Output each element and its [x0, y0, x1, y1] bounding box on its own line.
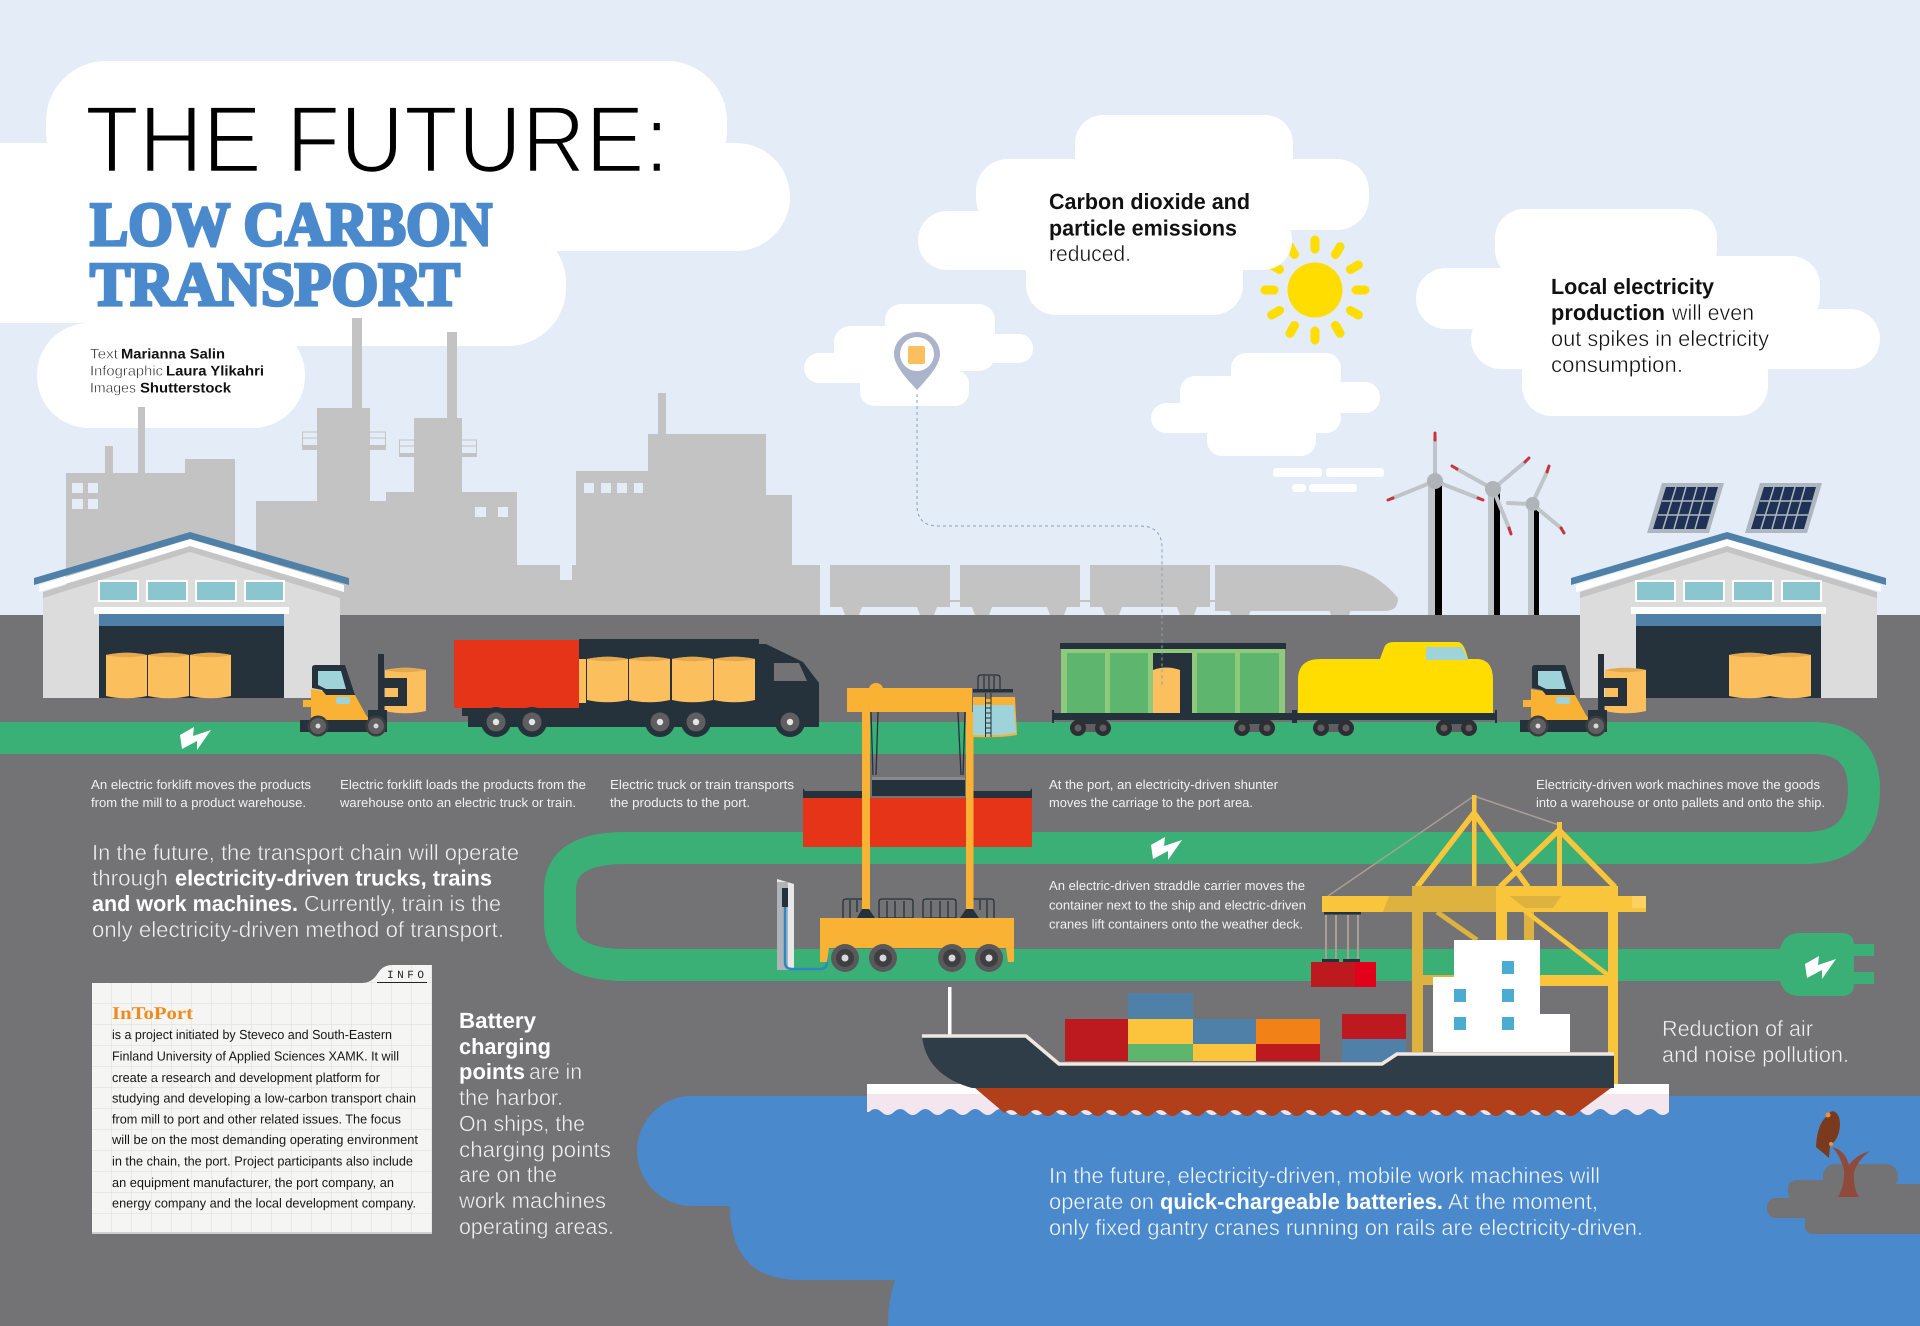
dashed connector line	[917, 394, 1162, 686]
straddle carrier	[777, 675, 1032, 972]
electric locomotive	[1292, 642, 1497, 736]
containers	[1065, 993, 1406, 1064]
legs	[862, 712, 870, 910]
forklift left	[300, 654, 426, 736]
water	[637, 1096, 1920, 1326]
callout: carbon dioxide: reduced.	[1049, 241, 1131, 266]
INFO tag	[377, 970, 427, 983]
distant train silhouette	[830, 565, 1398, 615]
step text: truck to port: Electric truck or train transports	[610, 777, 795, 792]
step text: shunter: At the port, an electricity-driven shunter	[1049, 777, 1279, 792]
cloud: carbon dioxide	[918, 115, 1369, 315]
icon: location pin	[894, 332, 940, 390]
text: quick-chargeable batteries: quick-chargeable batteries.	[1160, 1189, 1443, 1214]
barrels in right warehouse	[1729, 653, 1811, 698]
step text: work machines	[1536, 777, 1825, 810]
icon: lightning bolt 2	[1151, 837, 1182, 860]
gantry crane	[1311, 795, 1646, 1084]
step text: forklift to warehouse: An electric forklift moves the products	[91, 777, 312, 792]
text: battery charging points: points	[459, 1059, 525, 1084]
InToPort body text: energy company and the local development company.	[112, 1196, 416, 1210]
title: THE FUTURE:	[85, 87, 669, 193]
cab	[973, 697, 1017, 737]
step text: truck to port	[610, 777, 795, 810]
bird	[1816, 1111, 1840, 1158]
step text: forklift to warehouse	[91, 777, 312, 810]
callout: local electricity: consumption.	[1551, 352, 1683, 377]
credits: Marianna Salin	[121, 346, 225, 362]
wisps of cloud	[1273, 468, 1384, 492]
red container lifted	[803, 798, 1032, 847]
subtitle line 2: TRANSPORT	[90, 251, 460, 319]
InToPort body text: an equipment manufacturer, the port company, an	[112, 1175, 394, 1190]
step text: work machines: into a warehouse or onto pallets and onto the ship.	[1536, 795, 1825, 810]
spreader	[803, 777, 1032, 798]
electric truck	[454, 639, 819, 737]
text: battery charging points: On ships, the	[459, 1111, 585, 1136]
InToPort body text: Finland University of Applied Sciences XAMK. It will	[112, 1048, 399, 1064]
intro text block: electricity-driven trucks, trains	[175, 866, 492, 890]
top beam	[847, 683, 972, 712]
text: quick-chargeable batteries: At the moment,	[1448, 1189, 1598, 1214]
text: quick-chargeable batteries: only fixed gantry cranes running on rails are electricity-driven.	[1049, 1215, 1643, 1240]
wind turbines	[1388, 433, 1564, 615]
text: battery charging points: Battery	[459, 1008, 537, 1033]
credits: Text	[90, 346, 118, 362]
step text: forklift loads truck: warehouse onto an electric truck or train.	[339, 795, 576, 810]
solar panels	[1647, 483, 1822, 533]
credits	[90, 346, 264, 396]
step text: forklift loads truck	[339, 777, 586, 810]
cloud: small behind pin	[804, 304, 1033, 406]
InToPort body text: will be on the most demanding operating environment	[111, 1132, 418, 1147]
warehouse right	[1571, 532, 1886, 698]
text: battery charging points: charging	[459, 1034, 551, 1059]
plate under ship	[867, 1084, 1669, 1115]
sun	[1265, 240, 1365, 340]
intro text block: only electricity-driven method of transport.	[92, 917, 504, 942]
title cloud	[0, 61, 790, 428]
step text: forklift loads truck: Electric forklift loads the products from the	[340, 777, 586, 792]
callout: local electricity: production	[1551, 300, 1665, 325]
base	[820, 918, 1014, 962]
subtitle line 1: LOW CARBON	[90, 191, 492, 259]
InToPort body text: create a research and development platform for	[112, 1070, 381, 1085]
ground	[0, 615, 1920, 1326]
bare tree	[1832, 1147, 1870, 1197]
InToPort body text: studying and developing a low-carbon transport chain	[112, 1090, 416, 1106]
step text: shunter	[1049, 777, 1279, 810]
InToPort heading: InToPort	[112, 1003, 193, 1023]
step text: forklift to warehouse: from the mill to a product warehouse.	[91, 795, 306, 810]
island rock	[1767, 1164, 1920, 1234]
rust keel	[975, 1088, 1611, 1116]
callout: local electricity: Local electricity	[1551, 274, 1715, 299]
text: battery charging points: the harbor.	[459, 1085, 563, 1110]
container ship	[922, 940, 1614, 1116]
text: quick-chargeable batteries	[1049, 1163, 1643, 1240]
icon: lightning bolt 1	[180, 727, 211, 750]
step text: shunter: moves the carriage to the port area.	[1049, 795, 1253, 810]
intro text block: Currently, train is the	[304, 891, 501, 916]
cloud: small near sun	[1151, 353, 1380, 456]
text: reduction of pollution	[1662, 1016, 1849, 1067]
wheels	[831, 944, 859, 972]
step text: straddle carrier: An electric-driven straddle carrier moves the	[1049, 878, 1305, 893]
credits: Laura Ylikahri	[166, 362, 264, 378]
charging point	[777, 879, 829, 970]
text: reduction of pollution: and noise pollution.	[1662, 1042, 1849, 1067]
intro text block	[92, 840, 519, 942]
callout: carbon dioxide: Carbon dioxide and	[1049, 189, 1250, 214]
callout: carbon dioxide	[1049, 189, 1250, 266]
InToPort body text: from mill to port and other related issues. The focus	[112, 1112, 401, 1126]
callout: local electricity: out spikes in electricity	[1551, 326, 1769, 351]
step text: straddle carrier: cranes lift containers onto the weather deck.	[1049, 916, 1303, 932]
warehouse left	[34, 532, 349, 698]
cloud: local electricity	[1416, 209, 1880, 416]
text: battery charging points: charging points	[459, 1137, 611, 1162]
intro text block: In the future, the transport chain will operate	[92, 840, 519, 865]
text: reduction of pollution: Reduction of air	[1662, 1016, 1813, 1041]
intro text block: and work machines.	[92, 891, 298, 916]
hull	[922, 1036, 1614, 1088]
bridge building	[1433, 940, 1570, 1052]
cables	[871, 712, 965, 775]
crane legs and braces	[1412, 896, 1618, 1084]
InToPort body text: in the chain, the port. Project participants also include	[112, 1154, 413, 1168]
step text: straddle carrier	[1049, 878, 1306, 932]
hanging container	[1311, 912, 1376, 987]
text: battery charging points: operating areas.	[459, 1214, 614, 1239]
forklift right	[1520, 654, 1646, 736]
callout: local electricity: will even	[1671, 300, 1754, 325]
title	[85, 87, 669, 319]
credits: Images	[90, 380, 136, 396]
step text: work machines: Electricity-driven work machines move the goods	[1536, 777, 1821, 792]
barrels in left warehouse	[106, 653, 231, 698]
InToPort body text: is a project initiated by Steveco and South-Eastern	[112, 1027, 392, 1042]
step text: straddle carrier: container next to the ship and electric-driven	[1049, 898, 1306, 912]
text: quick-chargeable batteries: In the future, electricity-driven, mobile work machines will	[1049, 1163, 1600, 1188]
panel: InToPort info box	[92, 965, 432, 1234]
icon: lightning bolt on plug	[1805, 956, 1836, 979]
text: battery charging points: work machines	[458, 1188, 606, 1213]
text: battery charging points: are on the	[459, 1162, 557, 1187]
text: battery charging points	[458, 1008, 614, 1239]
credits: Infographic	[90, 362, 163, 378]
green electric track	[0, 738, 1874, 996]
text: battery charging points: are in	[529, 1059, 582, 1084]
InToPort body text	[111, 1027, 418, 1210]
callout: carbon dioxide: particle emissions	[1049, 216, 1237, 240]
mast	[948, 987, 952, 1036]
INFO tag: INFO	[387, 970, 424, 982]
small cages	[843, 899, 994, 918]
callout: local electricity	[1551, 274, 1769, 377]
step text: truck to port: the products to the port.	[610, 795, 750, 810]
text: quick-chargeable batteries: operate on	[1049, 1189, 1154, 1214]
electric shunter boxcar	[1052, 643, 1292, 736]
intro text block: through	[92, 866, 168, 890]
factory silhouettes	[66, 318, 820, 615]
credits: Shutterstock	[140, 380, 231, 396]
